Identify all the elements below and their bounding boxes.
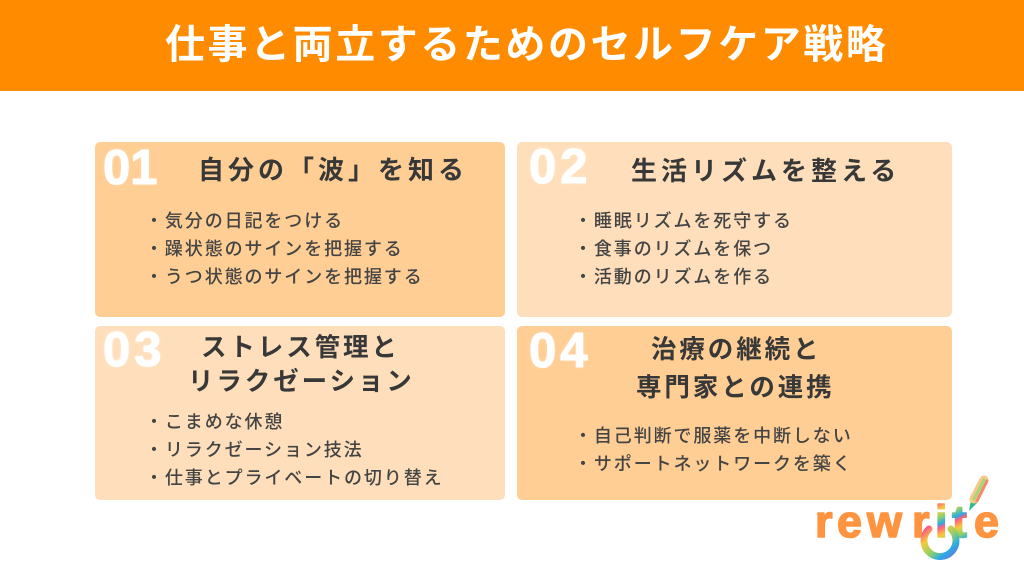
logo letters: t <box>952 496 967 547</box>
panel: 02 daily rhythm <box>517 142 952 317</box>
panel: 04 continued treatment <box>517 326 952 500</box>
title banner <box>0 0 1024 91</box>
list 02: ・活動のリズムを作る <box>574 267 773 287</box>
list 01 <box>145 211 424 287</box>
panel: 01 know your waves <box>95 142 505 317</box>
logo: rewrite <box>815 476 999 560</box>
logo letters <box>815 496 999 547</box>
logo letters: e <box>974 496 999 547</box>
logo ring <box>924 529 956 557</box>
list 04 <box>574 426 853 474</box>
heading 04 line 2: 専門家との連携 <box>636 374 835 402</box>
number 02: 02 <box>529 140 592 194</box>
list 01: ・気分の日記をつける <box>145 211 344 231</box>
number 01: 01 <box>103 141 158 195</box>
list 04: ・自己判断で服薬を中断しない <box>574 426 853 446</box>
list 03: ・リラクゼーション技法 <box>145 440 364 460</box>
panel: 03 stress management <box>95 326 505 500</box>
list 03: ・仕事とプライベートの切り替え <box>145 468 444 488</box>
title: 仕事と両立するためのセルフケア戦略 <box>165 23 888 67</box>
logo letters: rewr <box>815 496 930 547</box>
heading 03 line 2: リラクゼーション <box>188 368 415 396</box>
number 04: 04 <box>529 324 592 378</box>
list 01: ・躁状態のサインを把握する <box>145 239 404 259</box>
heading 01: 自分の「波」を知る <box>198 155 468 185</box>
number 03: 03 <box>103 323 166 377</box>
logo pencil <box>969 480 987 511</box>
list 04: ・サポートネットワークを築く <box>574 454 853 474</box>
list 02: ・睡眠リズムを死守する <box>574 211 793 231</box>
list 03 <box>145 412 444 488</box>
heading 02: 生活リズムを整える <box>631 156 900 186</box>
list 02 <box>574 211 793 287</box>
logo letters: i <box>935 496 948 547</box>
list 03: ・こまめな休憩 <box>145 412 284 432</box>
list 02: ・食事のリズムを保つ <box>574 239 773 259</box>
list 01: ・うつ状態のサインを把握する <box>145 267 424 287</box>
heading 03 line 1: ストレス管理と <box>201 334 400 362</box>
heading 04 line 1: 治療の継続と <box>651 336 821 364</box>
